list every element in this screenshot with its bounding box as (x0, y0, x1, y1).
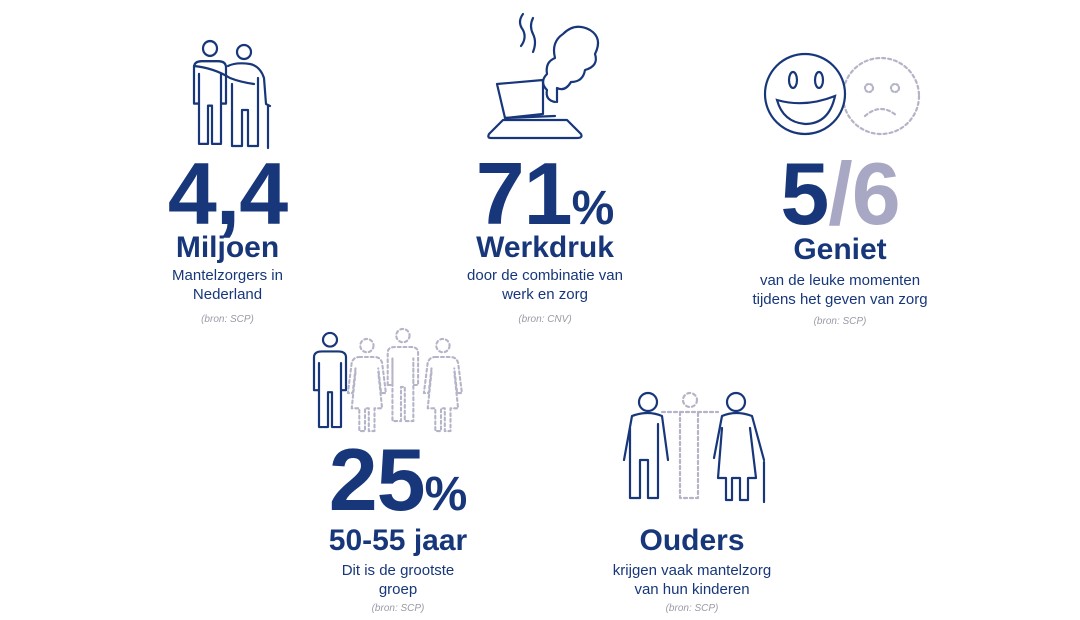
text: geniet desc: van de leuke momenten (760, 272, 920, 289)
source: (bron: SCP) (201, 314, 254, 325)
source: (bron: SCP) (372, 603, 424, 614)
heading: Geniet: Geniet (793, 233, 887, 266)
text: werkdruk desc: werk en zorg (502, 286, 588, 303)
text: Mantelzorgers: Mantelzorgers in (172, 267, 283, 284)
stat: 5/6: 5/6 (780, 144, 900, 243)
text: werkdruk desc: door de combinatie van (467, 267, 623, 284)
icon: caregiver couple (192, 40, 272, 150)
source: (bron: SCP) (814, 316, 866, 327)
heading: Werkdruk: Werkdruk (476, 231, 614, 264)
heading: Miljoen: Miljoen (176, 231, 279, 264)
heading: Ouders: Ouders (639, 524, 745, 557)
text: grootste groep: groep (379, 581, 417, 598)
icon: laptop with smoke (487, 12, 600, 140)
text: grootste groep (342, 562, 454, 598)
text: Mantelzorgers: Nederland (193, 286, 262, 303)
text: werkdruk desc (467, 267, 623, 303)
text: Mantelzorgers (172, 267, 283, 303)
text: ouders desc (613, 562, 771, 598)
stat: 25%: 25% (329, 430, 467, 529)
text: grootste groep: Dit is de grootste (342, 562, 454, 579)
source: (bron: SCP) (666, 603, 718, 614)
icon: happy and sad faces (764, 52, 920, 136)
stat: 71%: 71% (476, 144, 614, 243)
stat: 4,4: 4,4 (168, 144, 287, 243)
text: ouders desc: krijgen vaak mantelzorg (613, 562, 771, 579)
text: geniet desc (752, 272, 928, 308)
heading: 50-55 jaar: 50-55 jaar (329, 524, 467, 557)
text: geniet desc: tijdens het geven van zorg (752, 291, 928, 308)
icon: elderly parents with child (622, 392, 766, 504)
source: (bron: CNV) (518, 314, 572, 325)
icon: group of four people (312, 328, 463, 432)
text: ouders desc: van hun kinderen (634, 581, 750, 598)
